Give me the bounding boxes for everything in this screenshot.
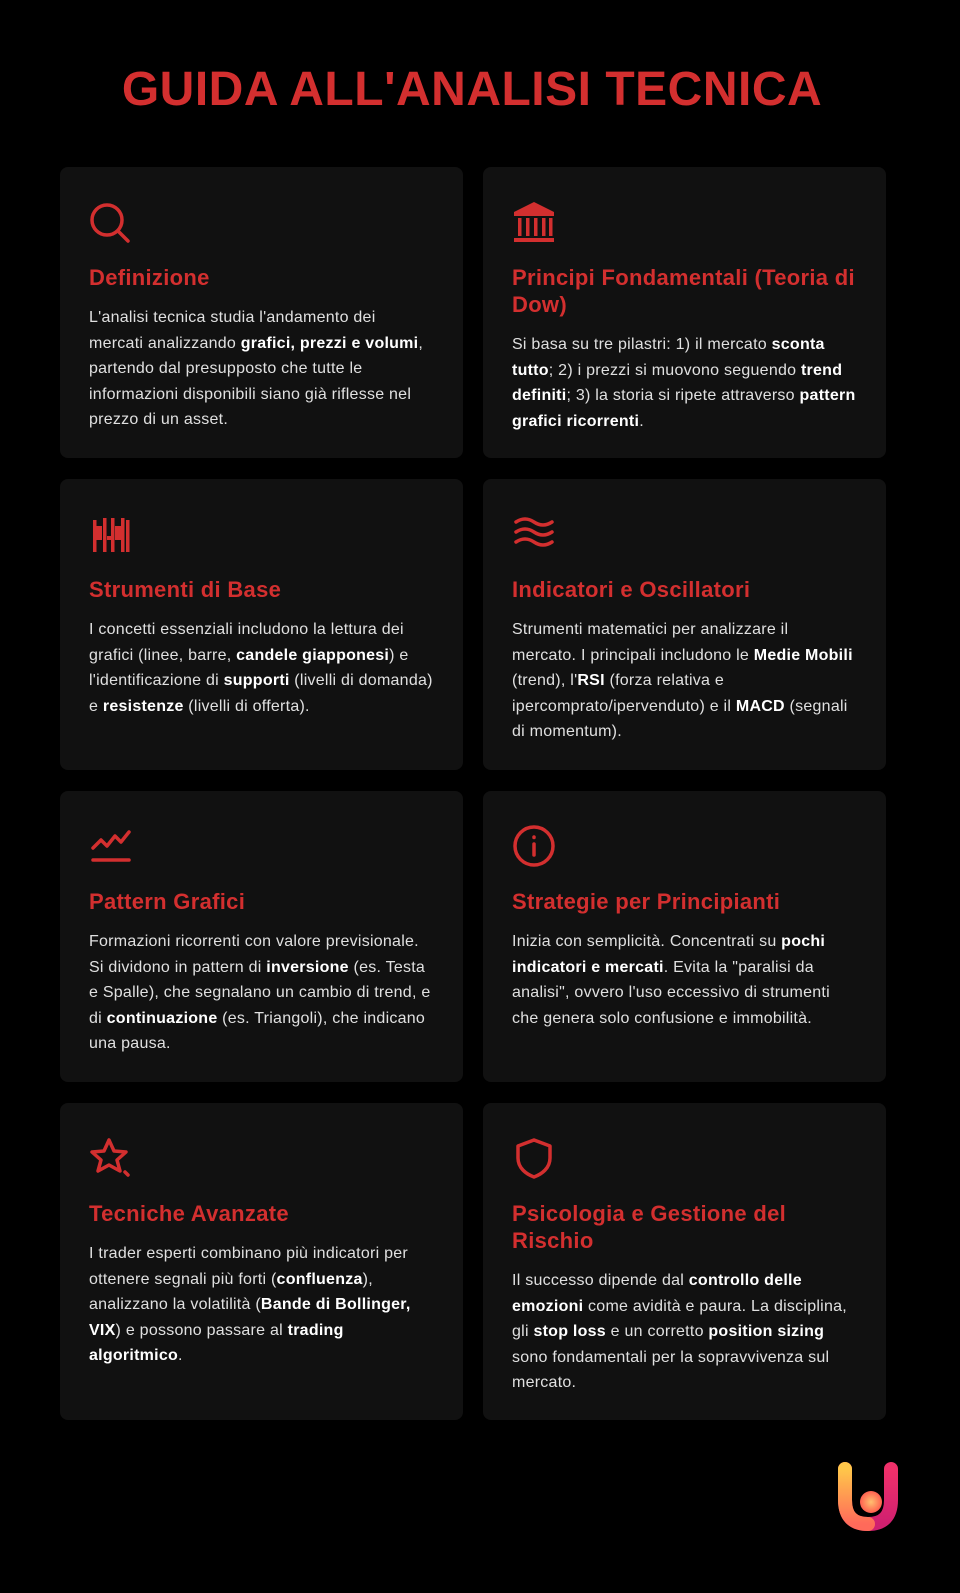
heading: Principi Fondamentali (Teoria di Dow) <box>512 265 855 317</box>
icon: candles <box>93 518 130 552</box>
icon: star <box>90 1138 130 1177</box>
text: Inizia con semplicità. Concentrati su pochi indicatori e mercati. Evita la "paralisi da analisi", ovvero l'uso eccessivo di strumenti che genera solo confusione e immobilità. <box>512 933 830 1027</box>
text: Strumenti matematici per analizzare il mercato. I principali includono le Medie Mobili (trend), l'RSI (forza relativa e ipercomprato/ipervenduto) e il MACD (segnali di momentum). <box>512 621 853 740</box>
heading: Strategie per Principianti <box>512 889 780 914</box>
heading: Indicatori e Oscillatori <box>512 577 750 602</box>
heading: Psicologia e Gestione del Rischio <box>512 1201 786 1253</box>
panel: indicatori <box>483 479 886 770</box>
panel: pattern <box>60 791 463 1082</box>
panel: psicologia <box>483 1103 886 1420</box>
heading: Pattern Grafici <box>89 889 245 914</box>
panel: principi <box>483 167 886 458</box>
text: Il successo dipende dal controllo delle emozioni come avidità e paura. La disciplina, gli stop loss e un corretto position sizing sono fondamentali per la sopravvivenza sul mercato. <box>512 1272 847 1391</box>
panel: definizione <box>60 167 463 458</box>
heading: Strumenti di Base <box>89 577 281 602</box>
text: I concetti essenziali includono la lettura dei grafici (linee, barre, candele giapponesi) e l'identificazione di supporti (livelli di domanda) e resistenze (livelli di offerta). <box>89 621 433 715</box>
icon: bank <box>514 202 554 242</box>
icon: info <box>513 825 555 867</box>
icon: search <box>90 203 130 243</box>
panel: strategie <box>483 791 886 1082</box>
text: Formazioni ricorrenti con valore previsionale. Si dividono in pattern di inversione (es. Testa e Spalle), che segnalano un cambio di trend, e di continuazione (es. Triangoli), che indicano una pausa. <box>89 933 430 1052</box>
icon: shield <box>516 1138 552 1179</box>
logo <box>838 1462 898 1531</box>
panel: strumenti <box>60 479 463 770</box>
icon: chart line <box>91 830 131 862</box>
panel: tecniche <box>60 1103 463 1420</box>
heading: Tecniche Avanzate <box>89 1201 289 1226</box>
text: I trader esperti combinano più indicatori per ottenere segnali più forti (confluenza), analizzano la volatilità (Bande di Bollinger, VIX) e possono passare al trading algoritmico. <box>89 1245 411 1364</box>
title: GUIDA ALL'ANALISI TECNICA <box>122 63 822 116</box>
heading: Definizione <box>89 265 210 290</box>
text: L'analisi tecnica studia l'andamento dei mercati analizzando grafici, prezzi e volumi, partendo dal presupposto che tutte le informazioni disponibili siano già riflesse nel prezzo di un asset. <box>89 309 423 428</box>
text: Si basa su tre pilastri: 1) il mercato sconta tutto; 2) i prezzi si muovono seguendo trend definiti; 3) la storia si ripete attraverso pattern grafici ricorrenti. <box>512 336 856 430</box>
icon: waves <box>514 517 554 547</box>
